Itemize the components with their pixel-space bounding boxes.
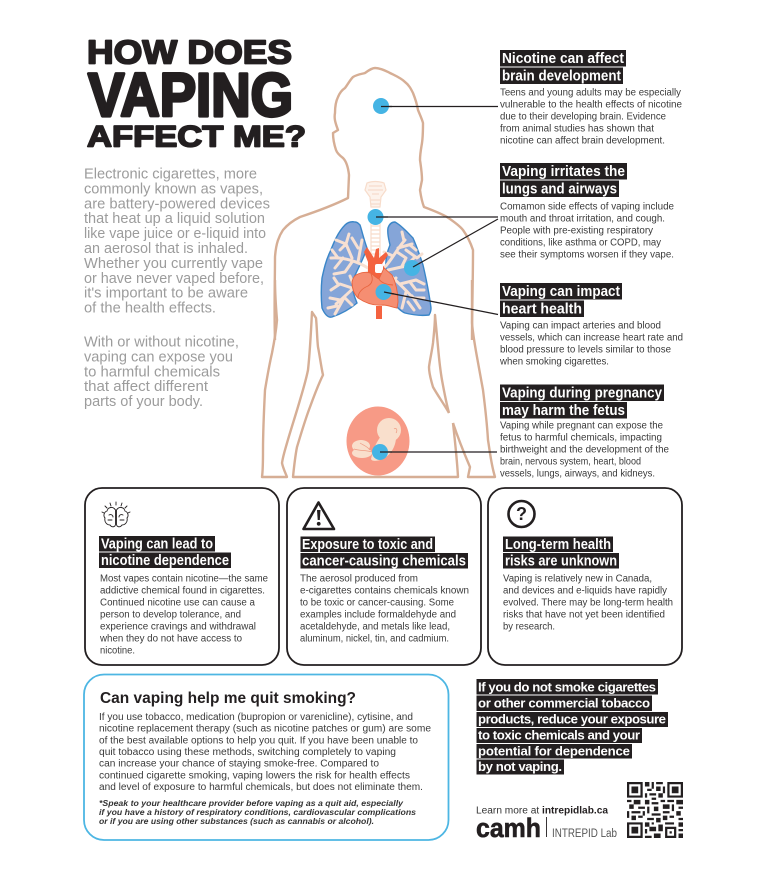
callout: do not vape: by not vaping.	[478, 759, 562, 774]
panel: heart health: heart health	[502, 302, 582, 318]
icon: question mark	[508, 501, 534, 527]
panel: unknown risks: risks are unknown	[505, 554, 617, 570]
panel: quit smoking: continued cigarette smoking, vaping lowers the risk for health effects	[99, 770, 410, 781]
panel: pregnancy: may harm the fetus	[502, 403, 625, 419]
panel: toxic chemicals	[287, 488, 481, 665]
panel: nicotine dependence: nicotine dependence	[101, 553, 229, 569]
intro paragraph: or have never vaped before,	[84, 270, 264, 287]
panel: lungs and airways: Vaping irritates the	[502, 164, 625, 180]
title	[87, 34, 306, 154]
callout: do not vape	[476, 679, 668, 774]
panel: nicotine dependence: Vaping can lead to	[101, 536, 213, 552]
panel: toxic chemicals: Exposure to toxic and	[302, 537, 433, 553]
panel: brain development: brain development	[502, 68, 621, 84]
panel: unknown risks	[488, 488, 682, 665]
panel: quit smoking: *Speak to your healthcare provider before vaping as a quit aid, especially	[99, 798, 404, 808]
panel: lungs and airways	[500, 163, 674, 261]
callout: do not vape: If you do not smoke cigarettes	[478, 680, 656, 694]
intro paragraph: are battery-powered devices	[84, 195, 270, 212]
panel: unknown risks: evolved. There may be long-term health	[503, 598, 673, 608]
panel: unknown risks: Long-term health	[505, 537, 611, 553]
panel: heart health	[499, 283, 683, 367]
logo: camh INTREPID Lab: INTREPID Lab	[552, 828, 617, 840]
panel: nicotine dependence: addictive chemical found in cigarettes.	[100, 586, 265, 596]
panel: quit smoking: or if you are using other substances (such as cannabis or alcohol).	[99, 816, 374, 826]
intro paragraph: commonly known as vapes,	[84, 180, 263, 197]
panel: lungs and airways: conditions, like asthma or COPD, may	[500, 238, 661, 249]
second intro paragraph: to harmful chemicals	[84, 363, 220, 380]
second intro paragraph: vaping can expose you	[84, 348, 233, 365]
second intro paragraph: that affect different	[84, 378, 209, 395]
title: AFFECT ME?	[87, 120, 306, 154]
panel: heart health: Vaping can impact	[502, 284, 620, 300]
intro paragraph: an aerosol that is inhaled.	[84, 240, 248, 257]
panel: nicotine dependence	[85, 488, 279, 665]
callout: do not vape: products, reduce your exposure	[478, 712, 666, 726]
panel: quit smoking: and level of exposure to harmful chemicals, but does not eliminate them.	[99, 782, 423, 793]
panel: brain development: due to their developing brain. Evidence	[500, 112, 666, 123]
panel: lungs and airways: People with pre-existing respiratory	[500, 226, 653, 237]
panel: unknown risks: Vaping is relatively new in Canada,	[503, 574, 652, 584]
panel: toxic chemicals: The aerosol produced from	[300, 574, 418, 584]
intro paragraph: Whether you currently vape	[84, 255, 263, 272]
blue marker dots	[368, 98, 420, 460]
second intro paragraph: parts of your body.	[84, 393, 203, 410]
panel: brain development	[500, 50, 682, 147]
panel: quit smoking: quit tobacco using these methods, switching completely to vaping	[99, 747, 396, 758]
panel: nicotine dependence: when they do not have access to	[99, 634, 242, 644]
heart	[352, 247, 398, 319]
logo: camh INTREPID Lab: camh	[476, 813, 541, 843]
panel: nicotine dependence: nicotine.	[100, 646, 135, 656]
lungs	[321, 222, 431, 317]
uterus and fetus	[346, 406, 410, 476]
connector lines	[376, 106, 498, 452]
icon: warning triangle	[304, 502, 334, 529]
logo: camh INTREPID Lab	[476, 813, 617, 843]
panel: brain development: vulnerable to the health effects of nicotine	[500, 100, 682, 111]
intro paragraph: that heat up a liquid solution	[84, 210, 265, 227]
title: VAPING	[88, 61, 293, 129]
body outline	[262, 68, 495, 477]
icon: question mark: ?	[516, 504, 527, 524]
panel: brain development: Teens and young adults may be especially	[500, 88, 681, 99]
panel: pregnancy: Vaping during pregnancy	[502, 386, 662, 402]
panel: heart health: when smoking cigarettes.	[499, 356, 609, 367]
panel: quit smoking	[84, 674, 448, 840]
panel: unknown risks: risks that have not yet been identified	[503, 610, 665, 620]
panel: brain development: Nicotine can affect	[502, 51, 624, 67]
panel: nicotine dependence: person to develop tolerance, and	[100, 610, 241, 620]
panel: nicotine dependence: experience cravings and withdrawal	[100, 622, 256, 632]
panel: unknown risks: and devices and e-liquids have rapidly	[503, 586, 667, 596]
panel: pregnancy: birthweight and the development of the	[500, 444, 669, 455]
panel: heart health: blood pressure to levels similar to those	[500, 344, 671, 355]
panel: brain development: from animal studies has shown that	[500, 124, 654, 135]
intro paragraph: it's important to be aware	[84, 285, 248, 302]
panel: lungs and airways: lungs and airways	[502, 182, 617, 198]
intro paragraph: Electronic cigarettes, more	[84, 166, 257, 182]
panel: toxic chemicals: aluminum, nickel, tin, and cadmium.	[300, 634, 449, 644]
panel: quit smoking: can increase your chance of staying smoke-free. Compared to	[99, 759, 379, 770]
panel: nicotine dependence: Most vapes contain nicotine—the same	[100, 574, 268, 584]
icon: brain	[102, 502, 130, 527]
panel: heart health: vessels, which can increase heart rate and	[500, 332, 683, 343]
callout: do not vape: or other commercial tobacco	[478, 696, 650, 710]
QR code	[627, 782, 683, 838]
panel: pregnancy	[500, 384, 669, 479]
panel: nicotine dependence: Continued nicotine use can cause a	[100, 598, 255, 608]
panel: heart health: Vaping can impact arteries and blood	[500, 320, 661, 331]
panel: quit smoking: if you have a history of respiratory conditions, cardiovascular complications	[99, 807, 416, 817]
panel: toxic chemicals: e-cigarettes contains chemicals known	[300, 586, 469, 596]
panel: lungs and airways: see their symptoms worsen if they vape.	[500, 250, 674, 261]
panel: toxic chemicals: examples include formaldehyde and	[300, 610, 456, 620]
callout: do not vape: to toxic chemicals and your	[478, 728, 640, 742]
panel: quit smoking: If you use tobacco, medication (bupropion or varenicline), cytisine, and	[99, 712, 413, 723]
learn more link: Learn more at intrepidlab.ca	[476, 806, 608, 816]
panel: pregnancy: fetus to harmful chemicals, impacting	[500, 432, 662, 443]
panel: toxic chemicals: acetaldehyde, and metals like lead,	[300, 622, 450, 632]
intro paragraph: of the health effects.	[84, 300, 216, 317]
panel: quit smoking: of the best available options to help you quit. If you have been unable to	[99, 735, 418, 746]
panel: brain development: nicotine can affect brain development.	[500, 136, 665, 147]
trachea	[365, 182, 386, 258]
panel: quit smoking: nicotine replacement therapy (such as nicotine patches or gum) are some	[99, 724, 431, 735]
panel: toxic chemicals: to be toxic or cancer-causing. Some	[300, 598, 454, 608]
panel: toxic chemicals: cancer-causing chemicals	[302, 554, 466, 570]
panel: quit smoking: Can vaping help me quit smoking?	[100, 690, 356, 707]
intro paragraph	[84, 166, 270, 317]
panel: lungs and airways: Comamon side effects of vaping include	[500, 202, 674, 213]
panel: pregnancy: Vaping while pregnant can expose the	[500, 420, 663, 431]
callout: do not vape: potential for dependence	[478, 744, 630, 758]
panel: pregnancy: vessels, lungs, airways, and kidneys.	[500, 468, 655, 479]
panel: lungs and airways: mouth and throat irritation, and cough.	[500, 214, 665, 225]
second intro paragraph	[84, 334, 239, 410]
intro paragraph: like vape juice or e-liquid into	[84, 225, 266, 242]
panel: unknown risks: by research.	[503, 622, 555, 632]
panel: pregnancy: brain, nervous system, heart, blood	[500, 456, 641, 467]
title: HOW DOES	[87, 34, 292, 70]
second intro paragraph: With or without nicotine,	[84, 334, 239, 350]
